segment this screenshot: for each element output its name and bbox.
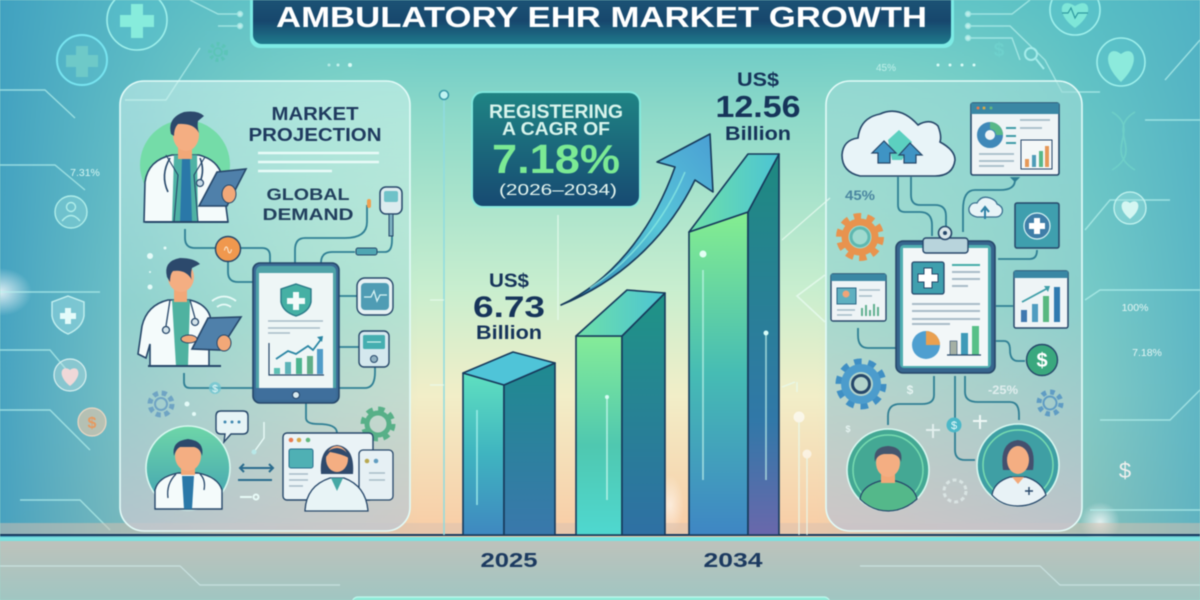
- heading: market projection: [248, 104, 382, 145]
- text lines placeholder: [258, 153, 379, 171]
- year labels: 2025: [480, 550, 538, 572]
- icon: measuring device: [359, 331, 389, 367]
- cross card: [912, 262, 944, 294]
- icon: small dollar node: [946, 418, 962, 432]
- decorative circuit lines, right: [966, 0, 1200, 510]
- icon: orange gear: [840, 217, 880, 257]
- decorative vertical line with node: [440, 90, 448, 535]
- icon: orange connector badge: [216, 236, 240, 262]
- callout: CAGR: (2026–2034): [499, 182, 617, 199]
- bars: [947, 326, 981, 355]
- icon: growth chart window: [1014, 271, 1068, 328]
- icon: dashboard window: [971, 103, 1059, 175]
- icon: exchange arrows: [238, 422, 273, 500]
- icon: right dollar: $: [1119, 458, 1131, 483]
- icon: green gear: [364, 410, 392, 438]
- label: minus 25 percent: -25%: [988, 383, 1018, 397]
- icon: small gear: [1039, 392, 1061, 414]
- icon: doctor with tablet middle: [138, 258, 241, 366]
- callout: CAGR: A CAGR OF: [502, 119, 610, 139]
- label: right percents: 7.18%: [1132, 347, 1162, 359]
- heading: global demand: GLOBAL: [266, 185, 350, 204]
- icon: blue gear: [840, 363, 882, 405]
- icon: cloud upload: [842, 111, 955, 176]
- icon: doctor with tablet top: [140, 112, 246, 222]
- value label 2025: [473, 271, 545, 344]
- callout: CAGR: REGISTERING: [489, 102, 623, 123]
- icon: profile window: [831, 274, 886, 321]
- icon: DNA helix: [1112, 112, 1135, 170]
- icon: cross badge: [1015, 203, 1059, 248]
- connectors: [858, 177, 1037, 460]
- connectors: [184, 205, 392, 433]
- bar 2025: [463, 352, 555, 535]
- icon: background dollar sign: $: [994, 40, 1005, 61]
- icon: sparkle dots: [147, 246, 196, 416]
- decorative lines behind chart: [430, 198, 830, 535]
- icon: dollar coin: [1026, 344, 1058, 376]
- bar 2034: [689, 154, 779, 535]
- panel: right workflow: [826, 81, 1082, 531]
- label: background percent top: 45%: [876, 63, 896, 74]
- icon: left heart: [54, 359, 86, 391]
- icon: heart circle right: [1097, 38, 1145, 86]
- label: faint dollar signs: $: [845, 424, 851, 434]
- label: faint dollar signs: [845, 383, 914, 434]
- heading: global demand: DEMAND: [262, 205, 354, 224]
- icon: small dollar node: $: [951, 420, 957, 432]
- icon: left shield: [52, 296, 84, 334]
- heading: market projection: MARKET: [272, 104, 358, 124]
- value label 2034: US$: [737, 70, 779, 91]
- icon: screen with woman doctor: [283, 433, 393, 511]
- bar chart: [463, 134, 779, 535]
- icon: doctor avatar bottom left: [146, 426, 230, 510]
- middle bar: [576, 290, 665, 535]
- value label 2034: Billion: [725, 124, 791, 145]
- icon: plus signs: [926, 415, 987, 438]
- heading: global demand: [262, 185, 354, 224]
- value label 2025: 6.73: [473, 291, 545, 324]
- icon: shield: [281, 284, 311, 316]
- icon: heart circle top right: [1050, 0, 1100, 35]
- icon: blue gear: [150, 393, 172, 415]
- label: faint dollar signs: $: [907, 383, 914, 397]
- icon: central tablet: [253, 263, 339, 403]
- icon: right heart: [1114, 192, 1146, 224]
- label: left percent: 7.31%: [70, 167, 100, 179]
- icon: orange connector badge: ∿: [223, 242, 233, 257]
- icon: background gear: [210, 44, 226, 60]
- icon: cross circle left: [57, 35, 107, 85]
- year labels: 2034: [704, 550, 764, 572]
- label: 45 percent: 45%: [845, 187, 876, 203]
- icon: left person: [55, 196, 87, 228]
- bottom bar edge: [352, 597, 830, 600]
- icon: magnifier: [1025, 48, 1044, 69]
- growth arrow: [561, 134, 713, 305]
- decorative dots label: top dots: [328, 63, 976, 67]
- icon: cross circle top left: [107, 0, 167, 50]
- panel: left workflow: [120, 81, 410, 531]
- mini bar chart: [269, 336, 324, 375]
- label: right percents: 100%: [1122, 302, 1148, 314]
- icon: chat bubble: [216, 411, 248, 442]
- icon: male avatar: [847, 429, 929, 511]
- icon: clipboard: [896, 226, 995, 373]
- pie chart: [912, 331, 940, 359]
- title banner: [250, 0, 954, 48]
- value label 2034: 12.56: [716, 89, 800, 124]
- title text: AMBULATORY EHR MARKET GROWTH: [276, 2, 927, 34]
- icon: heart monitor: [357, 278, 393, 315]
- callout: CAGR: 7.18%: [492, 136, 620, 182]
- value label 2034: [716, 70, 800, 145]
- value label 2025: US$: [489, 271, 529, 292]
- icon: faint gear bottom: [944, 480, 966, 502]
- ground band: [0, 523, 1200, 600]
- year labels: [480, 550, 764, 572]
- icon: left dollar badge: [78, 408, 106, 436]
- icon: dollar connector: $: [212, 384, 218, 395]
- icon: left dollar badge: $: [88, 415, 97, 432]
- heading: market projection: PROJECTION: [248, 125, 382, 145]
- icon: small upload cloud: [969, 197, 1002, 219]
- icon: dollar coin: $: [1036, 350, 1048, 372]
- callout: CAGR: [471, 91, 641, 208]
- icon: dollar connector: [209, 382, 221, 395]
- icon: female avatar: [977, 424, 1059, 506]
- decorative circuit lines, left: [0, 0, 242, 540]
- value label 2025: Billion: [476, 323, 542, 344]
- icon: handheld device: [356, 187, 402, 255]
- label: right percents: [1122, 302, 1162, 359]
